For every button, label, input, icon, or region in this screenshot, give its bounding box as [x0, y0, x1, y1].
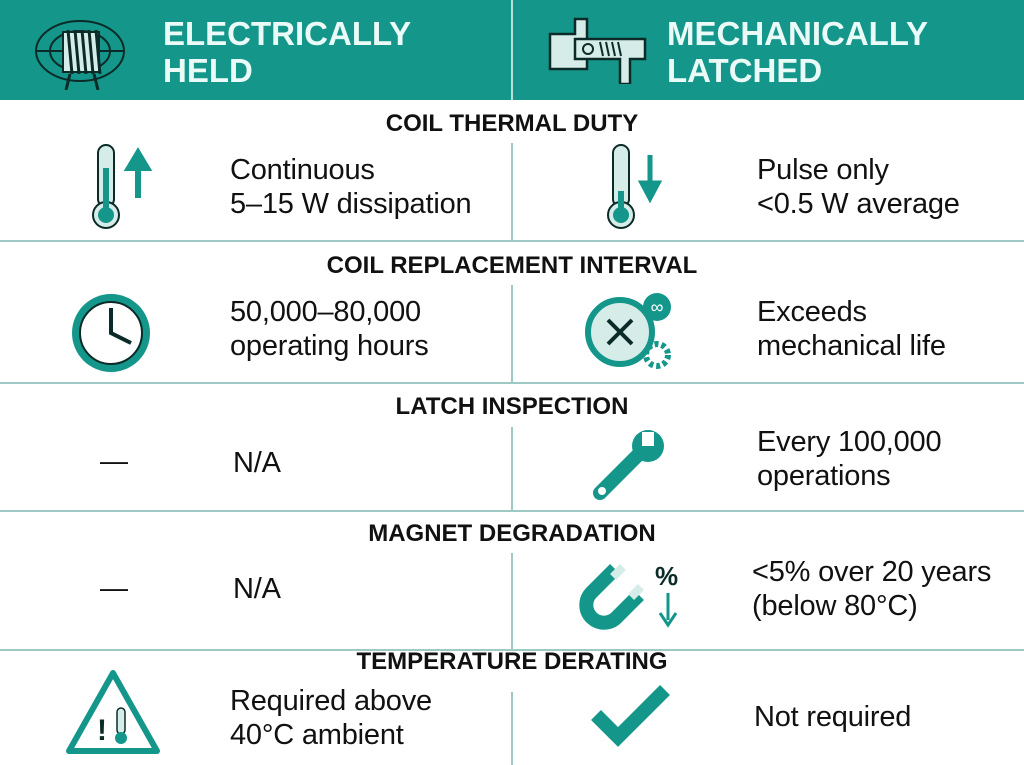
text: <5%: <5% over 20 years — [752, 556, 991, 588]
text: <5% — [752, 556, 991, 622]
header bar — [0, 0, 1024, 100]
icon: thermometer down — [607, 144, 662, 229]
text: required above — [230, 685, 432, 751]
icon: latch — [548, 18, 646, 84]
text: pulse only — [757, 154, 960, 220]
heading: temperature derating: TEMPERATURE DERATING — [356, 648, 668, 675]
text: required above: 40°C ambient — [230, 719, 404, 751]
text: every 100k — [757, 426, 941, 492]
text: hours: operating hours — [230, 330, 429, 362]
icon: wrench — [593, 430, 664, 500]
text: every 100k: Every 100,000 — [757, 426, 941, 458]
text: N/A: N/A — [233, 573, 281, 605]
icon: check — [591, 685, 670, 747]
icon: magnet — [579, 561, 678, 630]
heading: coil thermal duty: COIL THERMAL DUTY — [386, 110, 638, 137]
icon: warning: ! — [97, 714, 107, 747]
icon: clock — [72, 294, 150, 372]
text: hours: 50,000–80,000 — [230, 296, 421, 328]
icon: thermometer up — [92, 144, 152, 229]
text: continuous — [230, 154, 471, 220]
text: N/A: N/A — [233, 447, 281, 479]
text: exceeds: mechanical life — [757, 330, 946, 362]
text: exceeds: Exceeds — [757, 296, 867, 328]
header: electrically held — [163, 15, 411, 89]
text: every 100k: operations — [757, 460, 890, 492]
heading: latch inspection: LATCH INSPECTION — [396, 393, 628, 420]
icon: coil — [35, 20, 125, 90]
header: electrically held: ELECTRICALLY — [163, 15, 411, 52]
text: continuous: Continuous — [230, 154, 375, 186]
text: not required: Not required — [754, 701, 911, 733]
text: hours — [230, 296, 429, 362]
header: mechanically latched: LATCHED — [667, 52, 822, 89]
text: exceeds — [757, 296, 946, 362]
icon: magnet: % — [655, 561, 678, 591]
icon: infinity gear — [585, 293, 671, 369]
icon: infinity gear: ∞ — [651, 297, 664, 317]
text: pulse only: Pulse only — [757, 154, 889, 186]
text: required above: Required above — [230, 685, 432, 717]
icon: warning — [66, 670, 160, 754]
text: <5%: (below 80°C) — [752, 590, 918, 622]
text: continuous: 5–15 W dissipation — [230, 188, 471, 220]
header: mechanically latched — [667, 15, 928, 89]
text: pulse only: <0.5 W average — [757, 188, 960, 220]
dash: — — [100, 445, 128, 476]
heading: coil replacement interval: COIL REPLACEMENT INTERVAL — [327, 252, 697, 279]
header: mechanically latched: MECHANICALLY — [667, 15, 928, 52]
header: electrically held: HELD — [163, 52, 253, 89]
heading: magnet degradation: MAGNET DEGRADATION — [368, 520, 656, 547]
dash: — — [100, 572, 128, 603]
